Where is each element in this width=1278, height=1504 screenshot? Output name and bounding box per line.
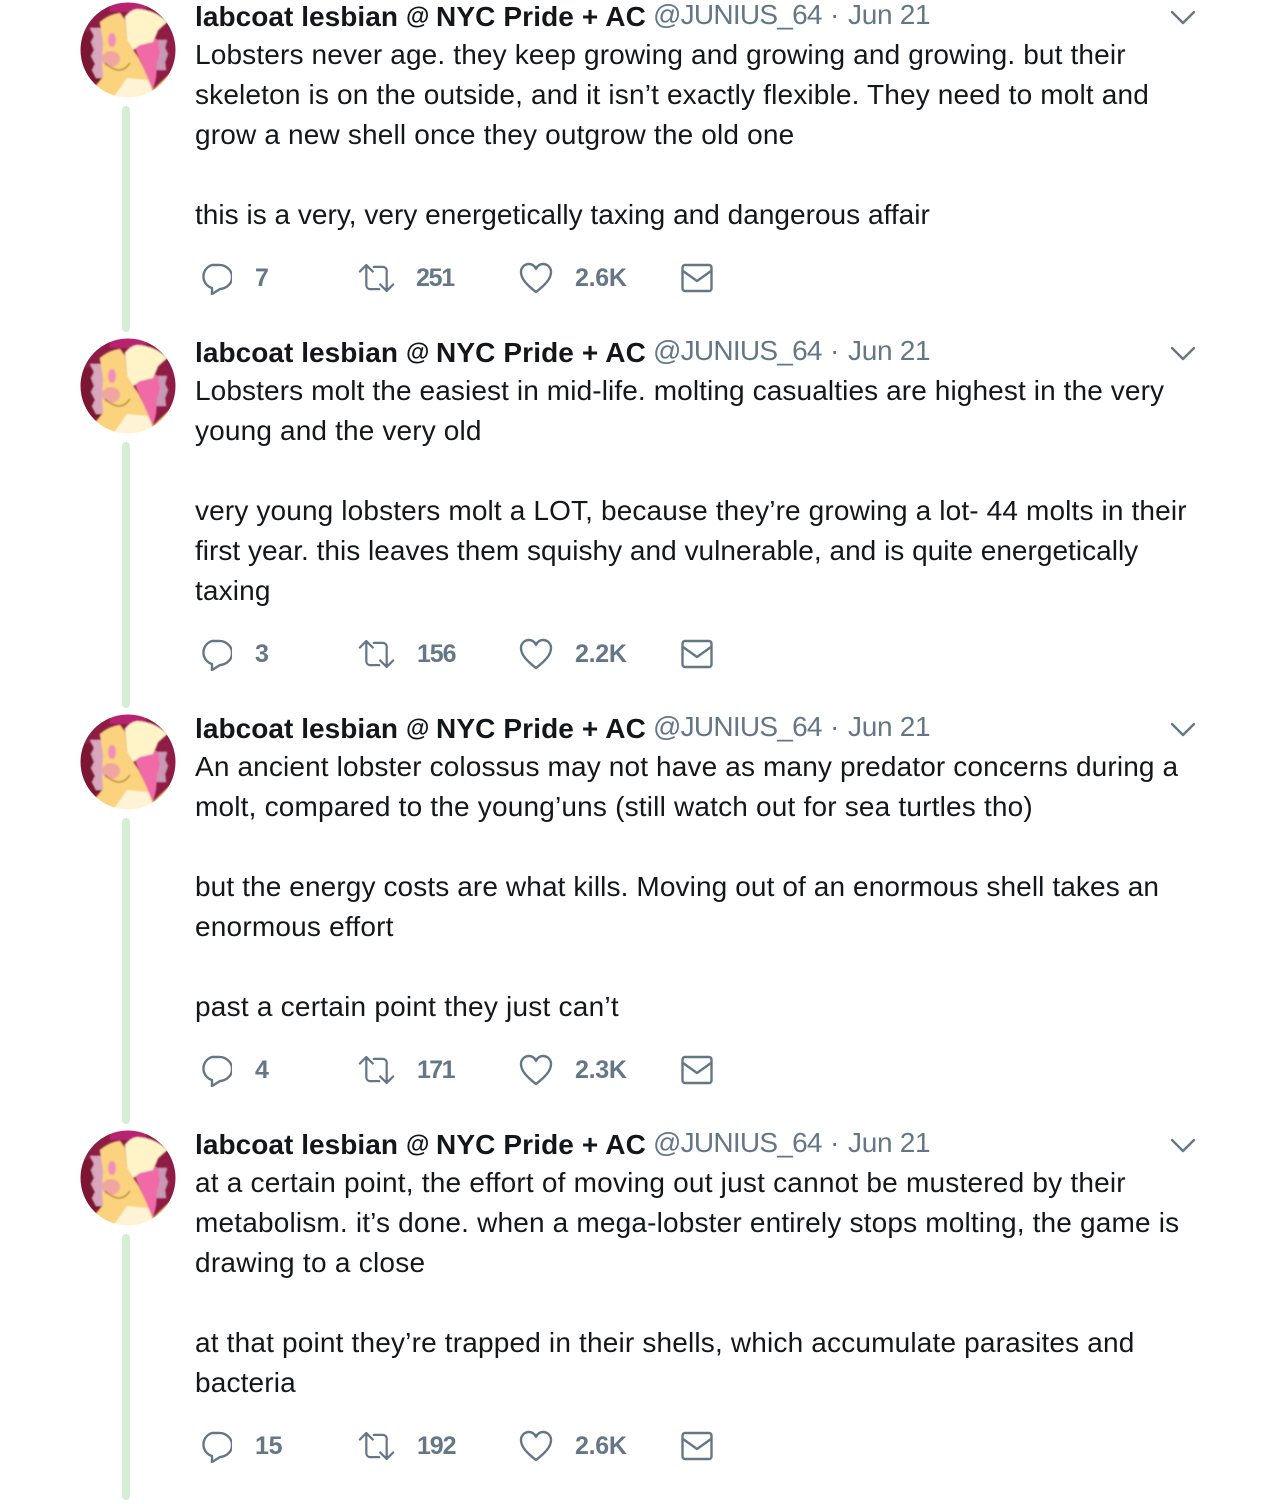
tweet text <box>195 39 1149 230</box>
tweet header: NYC Pride + AC <box>436 1 646 32</box>
thread line <box>122 106 130 332</box>
icon: chevron <box>1170 722 1196 736</box>
tweet text: at that point they’re trapped in their shells, which accumulate parasites and <box>195 1327 1135 1358</box>
tweet text: but the energy costs are what kills. Moving out of an enormous shell takes an <box>195 871 1159 902</box>
tweet text: An ancient lobster colossus may not have as many predator concerns during a <box>195 751 1178 782</box>
thread line <box>122 1234 130 1500</box>
tweet text: bacteria <box>195 1367 296 1398</box>
tweet text: skeleton is on the outside, and it isn’t exactly flexible. They need to molt and <box>195 79 1149 110</box>
tweet header: @ <box>406 1131 429 1158</box>
avatar <box>80 338 176 434</box>
tweet text: enormous effort <box>195 911 394 942</box>
tweet header: labcoat lesbian <box>195 1129 398 1160</box>
action bar: 4 <box>255 1056 269 1084</box>
icon: chevron <box>1170 10 1196 24</box>
thread line <box>122 818 130 1124</box>
tweet text: young and the very old <box>195 415 482 446</box>
tweet header: labcoat lesbian <box>195 1 398 32</box>
avatar <box>80 1130 176 1226</box>
tweet header: @JUNIUS_64 <box>653 335 822 366</box>
tweet header: @ <box>406 3 429 30</box>
tweet header: @ <box>406 339 429 366</box>
tweet text: very young lobsters molt a LOT, because they’re growing a lot- 44 molts in their <box>195 495 1187 526</box>
icon: chevron <box>1170 346 1196 360</box>
tweet header <box>195 711 930 744</box>
action bar: 2.6K <box>575 264 627 292</box>
tweet header: NYC Pride + AC <box>436 337 646 368</box>
action bar <box>202 262 713 295</box>
tweet text: metabolism. it’s done. when a mega-lobster entirely stops molting, the game is <box>195 1207 1179 1238</box>
action bar: 3 <box>255 640 269 668</box>
tweet header: @ <box>406 715 429 742</box>
tweet text: Lobsters molt the easiest in mid-life. molting casualties are highest in the very <box>195 375 1164 406</box>
action bar: 251 <box>416 264 454 292</box>
tweet text: grow a new shell once they outgrow the old one <box>195 119 794 150</box>
tweet text: Lobsters never age. they keep growing and growing and growing. but their <box>195 39 1126 70</box>
action bar <box>202 638 713 671</box>
tweet header <box>195 0 930 32</box>
action bar <box>202 1430 713 1463</box>
tweet text <box>195 751 1178 1022</box>
tweet text: drawing to a close <box>195 1247 425 1278</box>
tweet text: this is a very, very energetically taxing and dangerous affair <box>195 199 930 230</box>
avatar <box>80 714 176 810</box>
tweet header: · <box>830 711 839 742</box>
tweet text: at a certain point, the effort of moving out just cannot be mustered by their <box>195 1167 1126 1198</box>
tweet 4 <box>80 1127 1196 1500</box>
tweet text: first year. this leaves them squishy and vulnerable, and is quite energetically <box>195 535 1138 566</box>
tweet header: Jun 21 <box>848 1127 930 1158</box>
tweet header: Jun 21 <box>848 335 930 366</box>
tweet header: labcoat lesbian <box>195 713 398 744</box>
tweet header: NYC Pride + AC <box>436 713 646 744</box>
icon: chevron <box>1170 1138 1196 1152</box>
tweet text <box>195 375 1187 606</box>
tweet text <box>195 1167 1179 1398</box>
action bar: 171 <box>417 1056 454 1084</box>
action bar: 2.3K <box>575 1056 627 1084</box>
tweet header: @JUNIUS_64 <box>653 1127 822 1158</box>
tweet header: · <box>830 335 839 366</box>
tweet text: taxing <box>195 575 271 606</box>
action bar: 156 <box>417 640 455 668</box>
action bar: 2.2K <box>575 640 627 668</box>
action bar <box>202 1054 713 1087</box>
tweet header: @JUNIUS_64 <box>653 711 822 742</box>
tweet 2 <box>80 335 1196 708</box>
tweet text: molt, compared to the young’uns (still watch out for sea turtles tho) <box>195 791 1033 822</box>
action bar: 192 <box>417 1432 455 1460</box>
action bar: 15 <box>255 1432 282 1460</box>
tweet header: · <box>830 1127 839 1158</box>
thread line <box>122 442 130 708</box>
tweet header: labcoat lesbian <box>195 337 398 368</box>
avatar <box>80 2 176 98</box>
tweet text: past a certain point they just can’t <box>195 991 619 1022</box>
tweet 1 <box>80 0 1196 332</box>
tweet header <box>195 335 930 368</box>
action bar: 7 <box>255 264 269 292</box>
tweet header <box>195 1127 930 1160</box>
tweet header: NYC Pride + AC <box>436 1129 646 1160</box>
action bar: 2.6K <box>575 1432 627 1460</box>
tweet header: Jun 21 <box>848 711 930 742</box>
tweet 3 <box>80 711 1196 1124</box>
